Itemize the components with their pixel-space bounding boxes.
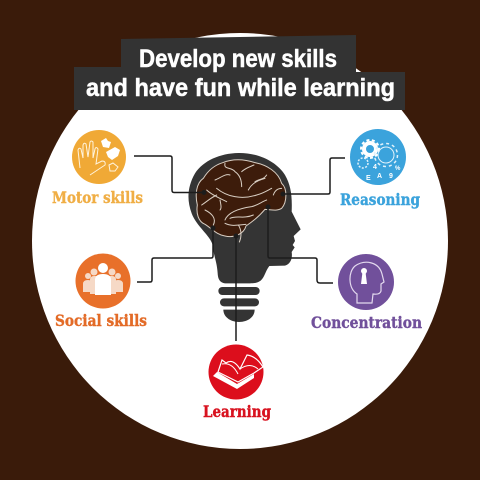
title line 1: Develop new skills (139, 45, 337, 73)
title line 2: and have fun while learning (86, 74, 395, 102)
item: reasoning (340, 129, 420, 209)
item: concentration (311, 254, 422, 332)
item: social skills (55, 254, 147, 330)
label: Motor skills (52, 188, 143, 207)
icon: group of people (76, 254, 130, 308)
label: Learning (203, 402, 271, 421)
item: motor skills (52, 130, 143, 207)
icon: open book on stack (208, 344, 264, 400)
connector lines (134, 156, 345, 341)
icon: gears and symbols: A (377, 173, 382, 180)
icon: gears and symbols: 4 (373, 164, 377, 171)
connector end dots (202, 190, 286, 238)
brain folds (202, 163, 282, 242)
icon: gears and symbols: 9 (389, 173, 393, 180)
icon: gears and symbols: E (366, 175, 371, 182)
icon: gears and symbols: % (395, 166, 401, 172)
item: learning (203, 344, 271, 421)
label: Concentration (311, 313, 422, 332)
brain (196, 160, 286, 237)
icon: light bulb head silhouette (188, 153, 301, 322)
label: Social skills (55, 311, 147, 330)
white background circle (32, 33, 448, 449)
title banner (74, 35, 405, 110)
icon: gears and symbols (350, 129, 406, 185)
icon: hand and puzzle pieces (72, 130, 126, 184)
icon: head with keyhole (338, 254, 394, 310)
bulb base (218, 287, 260, 322)
label: Reasoning (340, 190, 420, 209)
